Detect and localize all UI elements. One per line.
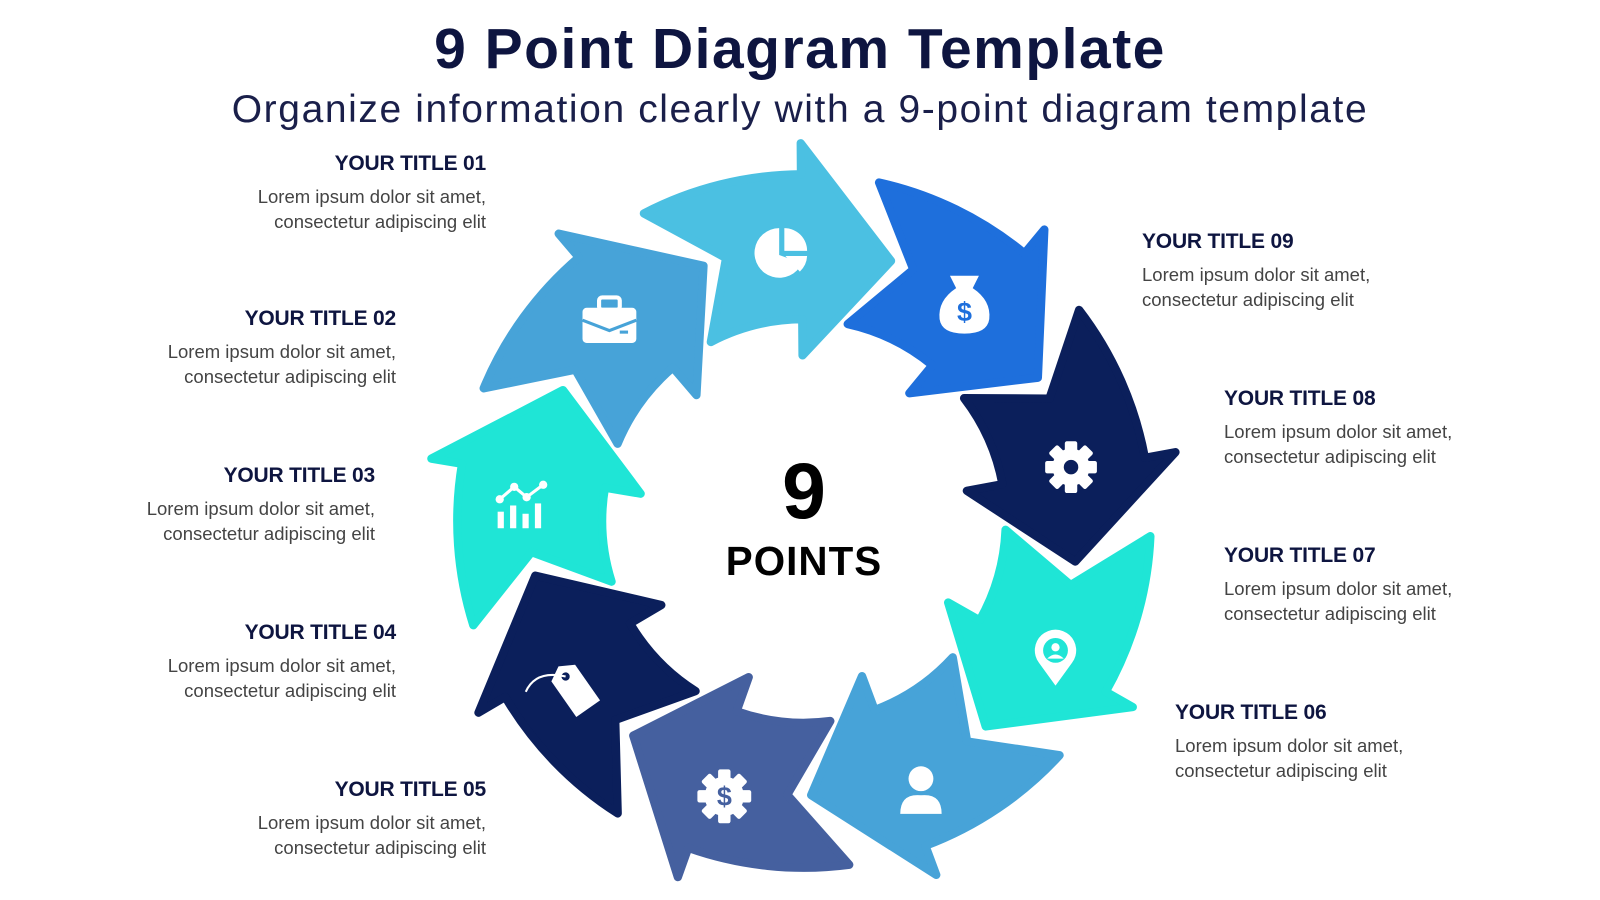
label 01: Lorem ipsum dolor sit amet, [258, 186, 486, 207]
label 08: YOUR TITLE 08 [1224, 387, 1375, 410]
icon: dollar gear: $ [717, 782, 732, 812]
label 09: consectetur adipiscing elit [1142, 289, 1354, 310]
title: 9 Point Diagram Template [434, 17, 1166, 81]
label 01 [258, 152, 486, 232]
icon: dollar gear [697, 769, 751, 823]
label 05 [258, 778, 486, 858]
icon: location pin [1035, 630, 1076, 686]
label 05: consectetur adipiscing elit [274, 837, 486, 858]
label 06: consectetur adipiscing elit [1175, 760, 1387, 781]
label 06 [1175, 701, 1403, 781]
label 07 [1224, 544, 1452, 624]
label 07: Lorem ipsum dolor sit amet, [1224, 578, 1452, 599]
label 09 [1142, 230, 1370, 310]
label 02: YOUR TITLE 02 [245, 307, 396, 330]
label 06: Lorem ipsum dolor sit amet, [1175, 735, 1403, 756]
label 01: YOUR TITLE 01 [335, 152, 486, 175]
label 03: consectetur adipiscing elit [163, 523, 375, 544]
label 01: consectetur adipiscing elit [274, 211, 486, 232]
icon: tag [523, 656, 600, 732]
icon: money bag [939, 276, 989, 334]
label 06: YOUR TITLE 06 [1175, 701, 1326, 724]
label 04: YOUR TITLE 04 [245, 621, 396, 644]
label 07: consectetur adipiscing elit [1224, 603, 1436, 624]
label 04: consectetur adipiscing elit [184, 680, 396, 701]
label 09: YOUR TITLE 09 [1142, 230, 1293, 253]
label 02: Lorem ipsum dolor sit amet, [168, 341, 396, 362]
label 03: YOUR TITLE 03 [224, 464, 375, 487]
center label: POINTS [726, 538, 882, 584]
label 08 [1224, 387, 1452, 467]
label 08: Lorem ipsum dolor sit amet, [1224, 421, 1452, 442]
label 02: consectetur adipiscing elit [184, 366, 396, 387]
label 03: Lorem ipsum dolor sit amet, [147, 498, 375, 519]
icon: chart [496, 481, 547, 528]
icon: pie chart [755, 228, 807, 278]
center number: 9 [782, 447, 826, 535]
icon: gear [1045, 441, 1097, 493]
label 08: consectetur adipiscing elit [1224, 446, 1436, 467]
subtitle: Organize information clearly with a 9-point diagram template [232, 88, 1368, 131]
label 09: Lorem ipsum dolor sit amet, [1142, 264, 1370, 285]
label 03 [147, 464, 375, 544]
label 05: YOUR TITLE 05 [335, 778, 486, 801]
icon: briefcase [583, 297, 636, 343]
label 04: Lorem ipsum dolor sit amet, [168, 655, 396, 676]
label 07: YOUR TITLE 07 [1224, 544, 1375, 567]
label 02 [168, 307, 396, 387]
label 04 [168, 621, 396, 701]
icon: person [900, 766, 942, 814]
label 05: Lorem ipsum dolor sit amet, [258, 812, 486, 833]
arrow segments ring [392, 113, 1225, 900]
icon: money bag: $ [957, 297, 972, 327]
